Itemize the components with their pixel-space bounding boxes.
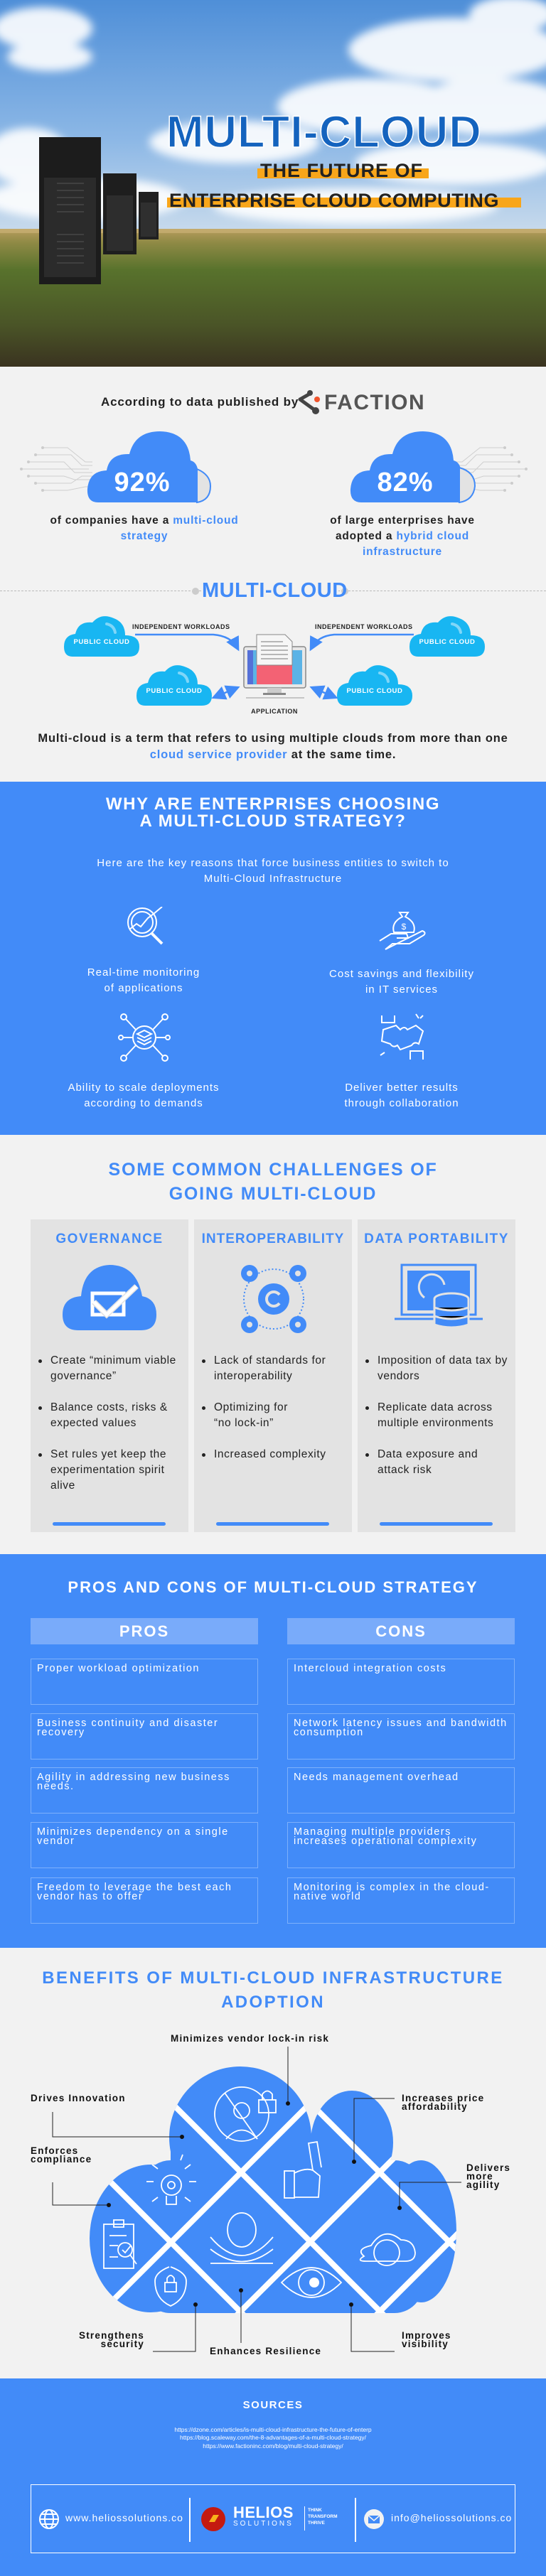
source attribution: Faction: According to data published by	[101, 395, 299, 409]
text: Enhances Resilience	[210, 2346, 321, 2356]
text: Enforces	[31, 2145, 78, 2156]
pros column: Proper workload optimization	[37, 1663, 200, 1674]
icon: gears	[241, 1265, 306, 1333]
sources list	[174, 2426, 372, 2450]
source attribution: Faction	[101, 390, 425, 414]
text: security	[101, 2339, 144, 2349]
text: Delivers	[466, 2162, 510, 2173]
icon: public cloud lower-left: PUBLIC CLOUD	[146, 687, 202, 695]
logo: helios solutions: TRANSFORM	[308, 2514, 338, 2519]
caption: of large enterprises have adopted a hybrid cloud infrastructure	[330, 514, 475, 558]
card: interoperability: INTEROPERABILITY	[202, 1232, 344, 1246]
reason: real-time monitoring: of applications	[105, 982, 183, 994]
heading: benefits: BENEFITS OF MULTI-CLOUD INFRASTRUCTURE	[42, 1968, 504, 1988]
heading: A MULTI-CLOUD STRATEGY?	[139, 812, 406, 831]
hero title	[166, 107, 521, 211]
diagram: benefits cloud	[90, 2066, 456, 2313]
footer contact box: www.heliossolutions.co	[65, 2512, 183, 2523]
card: interoperability: Lack of standards for interoperability	[214, 1354, 326, 1382]
cons column	[287, 1618, 515, 1924]
label: independent workloads	[132, 623, 413, 715]
pros column: Minimizes dependency on a single vendor	[37, 1826, 229, 1846]
logo: helios solutions: HELIOS	[233, 2504, 294, 2521]
source attribution: Faction: FACTION	[324, 391, 425, 414]
card: data portability: DATA PORTABILITY	[364, 1232, 509, 1246]
reason: real-time monitoring: Real-time monitoring	[87, 966, 200, 979]
servers	[39, 137, 159, 284]
heading: benefits	[42, 1968, 504, 2012]
logo: helios solutions: THINK	[308, 2508, 322, 2513]
stat: 92%	[20, 431, 239, 542]
card: governance: Set rules yet keep the experimentation spirit alive	[50, 1448, 166, 1492]
card: governance	[31, 1219, 188, 1532]
heading: benefits: ADOPTION	[221, 1993, 325, 2012]
heading: WHY ARE ENTERPRISES CHOOSING	[106, 794, 440, 814]
text: Drives Innovation	[31, 2093, 126, 2103]
reason: collaboration: Deliver better results	[345, 1082, 459, 1094]
reason: scale deployments: Ability to scale deployments	[68, 1082, 220, 1094]
pros column	[31, 1618, 258, 1924]
heading: challenges: GOING MULTI-CLOUD	[169, 1184, 377, 1204]
card: governance: GOVERNANCE	[55, 1232, 164, 1246]
sources list: https://dzone.com/articles/is-multi-cloud-infrastructure-the-future-of-enterp	[174, 2426, 372, 2433]
pros column: PROS	[119, 1622, 169, 1640]
icon: globe	[39, 2509, 59, 2529]
caption: of companies have a multi-cloud strategy	[50, 514, 239, 542]
text: Improves	[402, 2330, 451, 2341]
panel: sources and footer	[0, 2378, 546, 2576]
heading: challenges	[108, 1160, 438, 1204]
cons column: Monitoring is complex in the cloud-native world	[294, 1882, 490, 1902]
reason: real-time monitoring	[87, 907, 200, 994]
hero title: MULTI-CLOUD	[166, 107, 482, 157]
pros column: Business continuity and disaster recovery	[37, 1718, 218, 1738]
footer contact box: info@heliossolutions.co	[391, 2512, 512, 2523]
heading: challenges: SOME COMMON CHALLENGES OF	[108, 1160, 438, 1180]
arrows	[135, 635, 414, 697]
icon: monitor database	[395, 1263, 483, 1326]
logo: helios solutions: THRIVE	[308, 2521, 325, 2526]
multi-cloud heading with dashed line: MULTI-CLOUD	[202, 579, 348, 602]
text: visibility	[402, 2339, 449, 2349]
stat: 92%: 92%	[114, 468, 171, 497]
label: independent workloads: APPLICATION	[251, 708, 298, 715]
label: independent workloads: INDEPENDENT WORKLOADS	[315, 623, 413, 630]
reason: scale deployments: according to demands	[84, 1097, 203, 1109]
subtitle: Multi-Cloud Infrastructure	[204, 873, 342, 885]
sources list: https://www.factioninc.com/blog/multi-cloud-strategy/	[203, 2442, 343, 2450]
subtitle: Here are the key reasons that force business entities to switch to	[97, 857, 449, 869]
heading: PROS AND CONS OF MULTI-CLOUD STRATEGY	[68, 1578, 478, 1596]
definition text: Multi-cloud is a term that refers to using multiple clouds from more than one cloud service provider at the same time.	[38, 732, 508, 761]
text: more	[466, 2171, 493, 2182]
card: governance: Balance costs, risks & expected values	[50, 1401, 168, 1429]
footer contact box	[31, 2484, 515, 2553]
diagram: public clouds to application	[64, 616, 485, 715]
sources heading: SOURCES	[243, 2399, 303, 2411]
icon: email	[364, 2509, 384, 2529]
card: data portability	[358, 1219, 515, 1532]
cons column: Needs management overhead	[294, 1772, 459, 1783]
icon: cloud check	[63, 1265, 156, 1330]
icon: public cloud top-right: PUBLIC CLOUD	[419, 638, 475, 646]
panel: pros and cons	[0, 1554, 546, 1948]
stat: 82%: 82%	[377, 468, 434, 497]
sources list: https://blog.scaleway.com/the-8-advantages-of-a-multi-cloud-strategy/	[180, 2434, 366, 2441]
leader lines and dots	[53, 2047, 461, 2352]
hero image: sky, field and servers	[0, 0, 546, 367]
text: Increases price	[402, 2093, 484, 2103]
pros column: Freedom to leverage the best each vendor has to offer	[37, 1882, 232, 1902]
reason: collaboration	[344, 1013, 459, 1109]
logo: helios solutions	[201, 2504, 338, 2531]
hero title: ENTERPRISE CLOUD COMPUTING	[169, 190, 499, 211]
card: interoperability: Increased complexity	[214, 1448, 326, 1460]
reason: cost savings: in IT services	[365, 983, 438, 996]
reason: cost savings: $	[402, 922, 407, 932]
icon: public cloud lower-left	[136, 665, 212, 706]
cons column: Intercloud integration costs	[294, 1663, 446, 1674]
stat: 82%	[330, 431, 528, 558]
icon: public cloud lower-right	[337, 665, 412, 706]
reason: cost savings: Cost savings and flexibility	[329, 968, 474, 980]
label: independent workloads: INDEPENDENT WORKLOADS	[132, 623, 230, 630]
icon: application monitor	[244, 635, 306, 698]
icon: public cloud lower-right: PUBLIC CLOUD	[347, 687, 402, 695]
card: data portability: Imposition of data tax by vendors	[378, 1354, 508, 1382]
cons column: Network latency issues and bandwidth consumption	[294, 1718, 508, 1738]
reason: scale deployments	[68, 1013, 220, 1109]
benefit labels: Minimizes vendor lock-in risk	[171, 2033, 329, 2044]
panel: why enterprises choose multi-cloud	[0, 782, 546, 1135]
text: agility	[466, 2179, 500, 2190]
pros column: Agility in addressing new business needs.	[37, 1772, 230, 1792]
card: governance: Create “minimum viable governance”	[50, 1354, 176, 1382]
logo: helios solutions: SOLUTIONS	[233, 2520, 294, 2528]
card: interoperability: Optimizing for	[214, 1401, 288, 1413]
card: data portability: Data exposure and attack risk	[378, 1448, 478, 1476]
subtitle	[97, 857, 449, 885]
text: Strengthens	[79, 2330, 144, 2341]
icon: faction logo	[299, 390, 320, 414]
cons column: Managing multiple providers increases operational complexity	[294, 1826, 477, 1846]
text: affordability	[402, 2101, 468, 2112]
reason: collaboration: through collaboration	[344, 1097, 459, 1109]
card: interoperability	[194, 1219, 352, 1532]
card: data portability: Replicate data across multiple environments	[378, 1401, 493, 1429]
card: interoperability: “no lock-in”	[214, 1417, 274, 1429]
heading	[105, 794, 440, 831]
icon: public cloud top-right	[410, 616, 485, 657]
icon: public cloud top-left: PUBLIC CLOUD	[74, 638, 129, 646]
text: compliance	[31, 2154, 92, 2165]
reason: cost savings	[329, 912, 474, 996]
cons column: CONS	[375, 1622, 427, 1640]
multi-cloud heading with dashed line	[0, 579, 546, 602]
hero title: THE FUTURE OF	[260, 160, 423, 181]
icon: public cloud top-left	[64, 616, 139, 657]
